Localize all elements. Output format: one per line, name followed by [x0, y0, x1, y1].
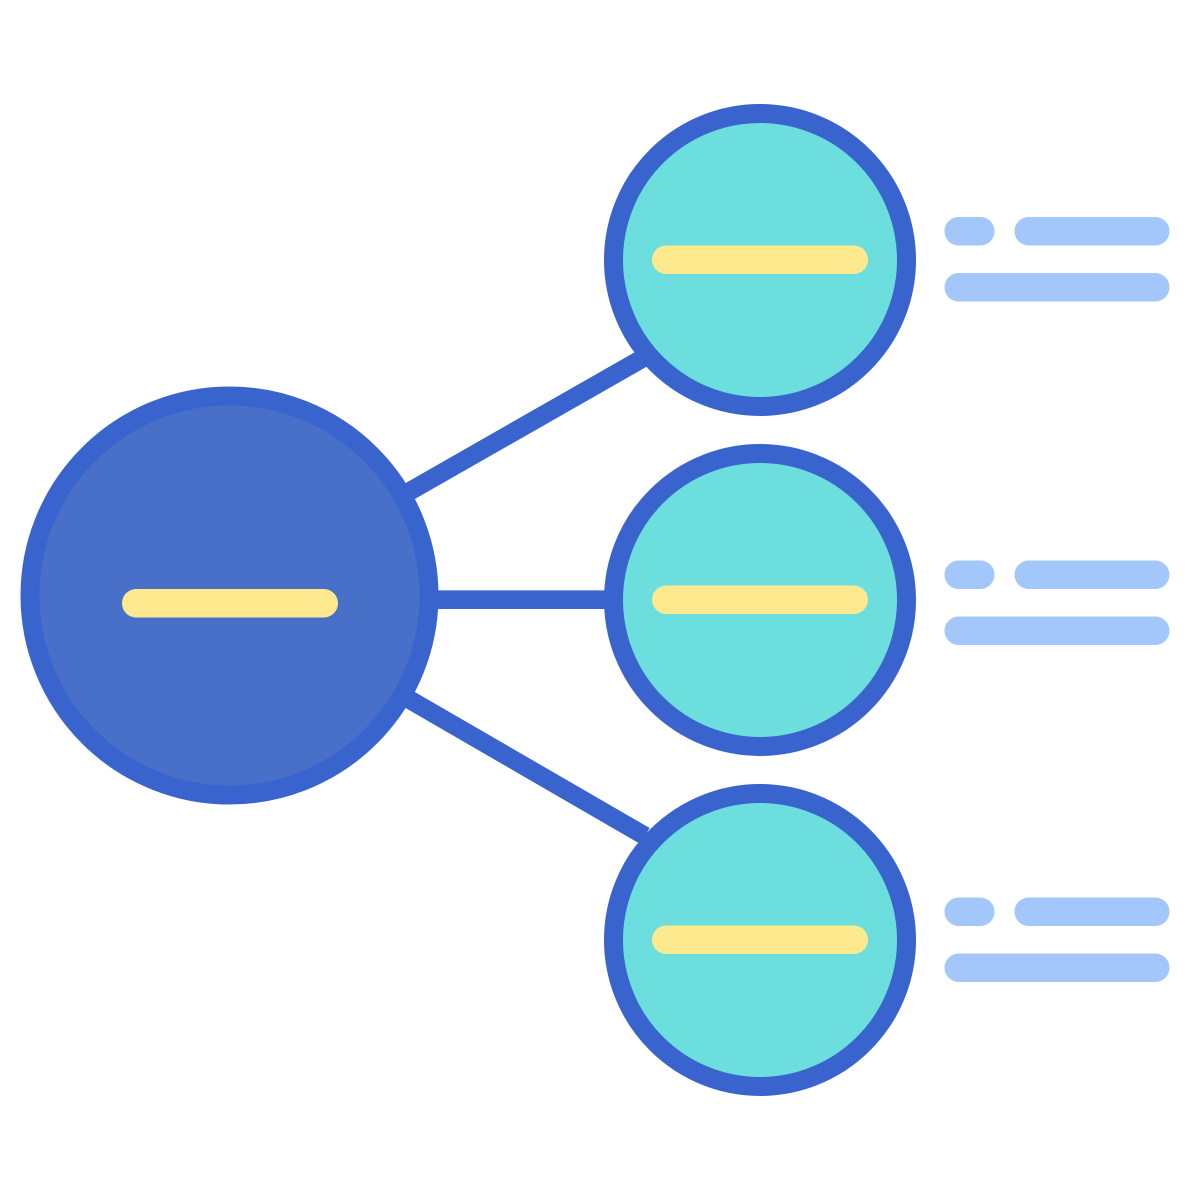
connector: hub to middle node	[430, 590, 612, 609]
middle node label bar	[652, 586, 868, 614]
text placeholder: bottom node	[944, 898, 1170, 982]
connector: hub to bottom node	[405, 697, 645, 836]
top node label bar	[652, 246, 868, 274]
bottom node label bar	[652, 926, 868, 954]
text placeholder: middle node	[944, 560, 1170, 645]
text placeholder: top node	[944, 217, 1170, 302]
bottom node	[614, 794, 906, 1086]
middle node	[614, 454, 906, 746]
connector: hub to top node	[405, 357, 645, 494]
top node	[614, 114, 906, 406]
hub circle	[30, 396, 429, 795]
hub label bar	[122, 589, 338, 618]
